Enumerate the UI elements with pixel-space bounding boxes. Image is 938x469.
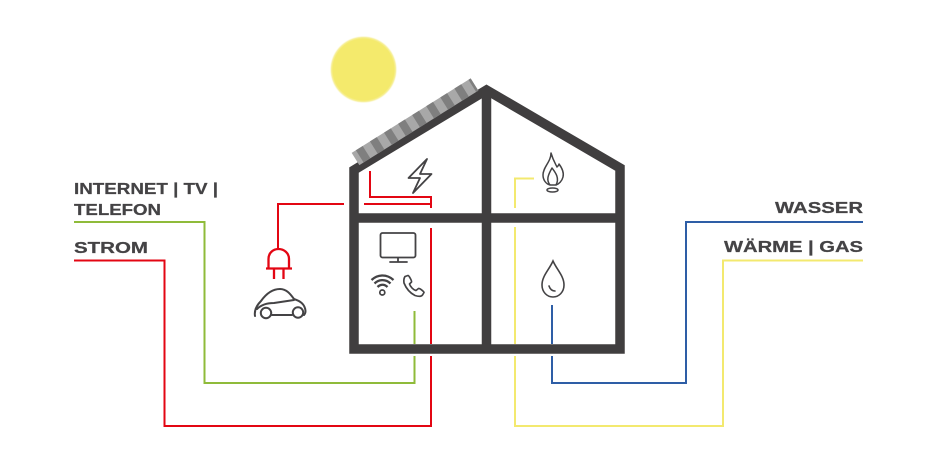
icon: sun xyxy=(330,36,398,104)
line: waerme gas (yellow) xyxy=(515,178,863,426)
label: wasser: WASSER xyxy=(775,200,864,217)
icon: telephone xyxy=(404,276,424,296)
line: strom (red) xyxy=(74,171,431,426)
label: internet tv telefon: TELEFON xyxy=(74,202,161,219)
solar panel xyxy=(356,84,474,159)
icon: flame xyxy=(543,153,563,192)
icon: wifi xyxy=(372,276,394,295)
icon: monitor xyxy=(380,233,416,262)
line: internet tv telefon (green) xyxy=(74,222,414,383)
house outline xyxy=(354,90,620,349)
icon: car xyxy=(255,289,306,318)
line: wasser (blue) xyxy=(552,222,863,383)
label: waerme gas: WÄRME | GAS xyxy=(724,238,863,256)
label: strom: STROM xyxy=(74,240,148,257)
icon: lightning bolt xyxy=(408,159,432,193)
label: internet tv telefon xyxy=(74,181,218,219)
label: internet tv telefon: INTERNET | TV | xyxy=(74,181,218,198)
icon: plug xyxy=(266,249,292,279)
icon: water drop xyxy=(542,261,564,297)
